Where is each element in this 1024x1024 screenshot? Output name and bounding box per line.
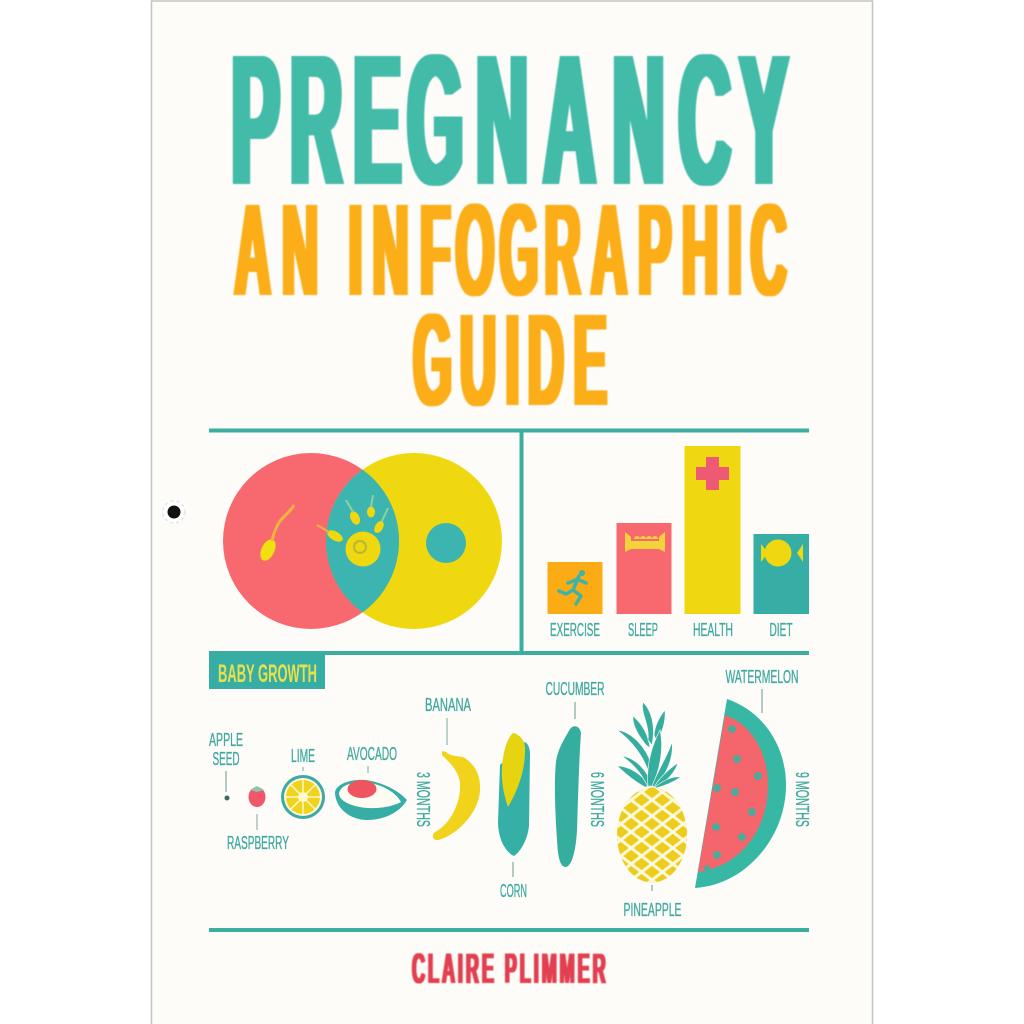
raspberry: RASPBERRY bbox=[227, 833, 289, 853]
subtitle: An Infographic: AN INFOGRAPHIC bbox=[235, 177, 787, 324]
cucumber: CUCUMBER bbox=[546, 679, 604, 699]
avocado bbox=[335, 744, 407, 820]
venn diagram: conception bbox=[223, 453, 502, 629]
lime: LIME bbox=[291, 746, 315, 766]
subtitle: Guide: GUIDE bbox=[413, 287, 607, 434]
banana: BANANA bbox=[425, 695, 471, 715]
bar label: sleep: SLEEP bbox=[628, 620, 658, 640]
icon: egg with sperm bbox=[317, 495, 388, 566]
watermelon bbox=[695, 667, 798, 888]
heading: baby growth: BABY GROWTH bbox=[218, 660, 317, 688]
bar label: diet: DIET bbox=[770, 620, 792, 640]
raspberry bbox=[227, 786, 289, 853]
pineapple body bbox=[617, 788, 687, 882]
bar: health bbox=[684, 446, 740, 614]
title: Pregnancy: PREGNANCY bbox=[231, 15, 788, 224]
icon: sperm left bbox=[257, 505, 294, 563]
corn bbox=[498, 733, 530, 901]
months label: 9 months: 9 MONTHS bbox=[792, 772, 812, 827]
avocado: AVOCADO bbox=[347, 744, 397, 764]
book cover bbox=[152, 1, 872, 1024]
months label: 3 months: 3 MONTHS bbox=[413, 772, 433, 827]
apple seed: SEED bbox=[212, 749, 240, 769]
venn overlap bbox=[326, 470, 399, 612]
apple seed: APPLE bbox=[209, 730, 243, 750]
months label: 6 months: 6 MONTHS bbox=[587, 772, 607, 827]
author name: CLAIRE PLIMMER bbox=[412, 944, 609, 992]
bar label: health: HEALTH bbox=[693, 620, 733, 640]
pineapple leaves bbox=[617, 702, 681, 788]
lime bbox=[281, 746, 325, 819]
heading: baby growth bbox=[209, 653, 325, 689]
pineapple: PINEAPPLE bbox=[624, 900, 682, 920]
bar: exercise bbox=[548, 562, 602, 614]
icon: egg bbox=[426, 523, 466, 563]
bar label: exercise: EXERCISE bbox=[550, 620, 600, 640]
bar: diet bbox=[754, 534, 809, 614]
watermelon: WATERMELON bbox=[726, 667, 798, 687]
bar: sleep bbox=[616, 523, 672, 614]
bar chart: wellbeing bbox=[548, 446, 809, 640]
subtitle: An Infographic and Guide bbox=[235, 177, 787, 434]
banana bbox=[425, 695, 480, 840]
baby growth chart bbox=[208, 670, 810, 916]
icon: registration mark bbox=[163, 501, 185, 523]
corn: CORN bbox=[500, 881, 527, 901]
pineapple bbox=[617, 702, 687, 916]
cucumber bbox=[546, 679, 604, 867]
apple seed bbox=[209, 730, 243, 800]
